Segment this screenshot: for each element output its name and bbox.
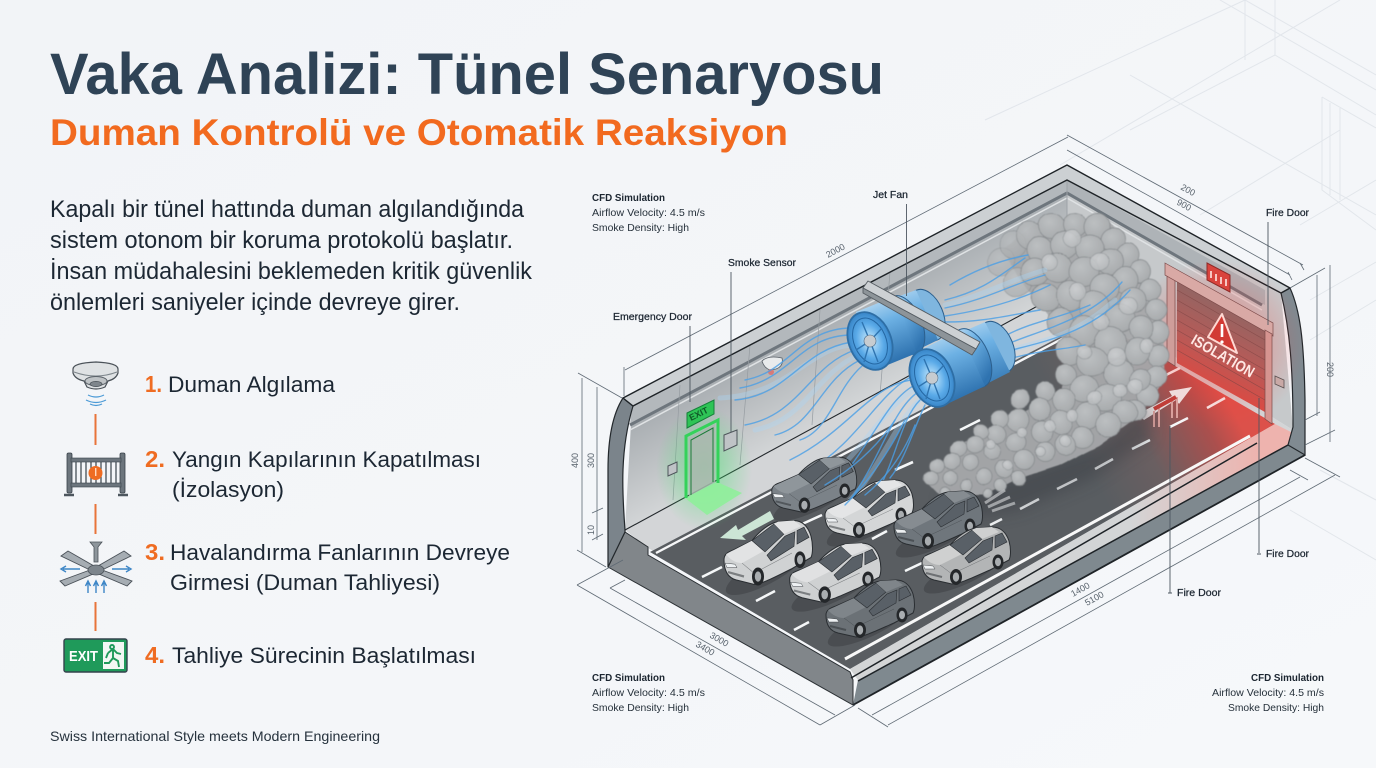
footer tagline: Swiss International Style meets Modern Engineering	[50, 728, 380, 744]
icon: exit sign	[64, 639, 127, 672]
road lane dashes	[702, 368, 1225, 630]
dimension values: 3400	[694, 639, 716, 658]
label: fire door lower: Fire Door	[1177, 587, 1221, 599]
car: dark grey back right	[891, 491, 982, 565]
smoke wisps behind cars	[985, 490, 1015, 511]
car: white SUV front	[721, 521, 812, 604]
wall box beside door	[1275, 376, 1284, 388]
smoke base mass	[925, 222, 1165, 495]
ceiling cap	[623, 165, 1290, 406]
right cut arch section	[1281, 288, 1305, 455]
intro paragraph	[50, 196, 533, 316]
red barrier	[1154, 397, 1177, 427]
exit sign: EXIT	[687, 405, 710, 423]
cars	[721, 457, 1010, 654]
step 2 label: (İzolasyon)	[172, 477, 284, 502]
dimension lines	[570, 135, 1340, 727]
airflow over cars	[825, 420, 915, 505]
jet fans	[839, 281, 1022, 414]
front concrete kerb	[608, 532, 853, 705]
dimension values: 2000	[824, 242, 847, 260]
step connectors	[94, 414, 96, 631]
step 1 label: Duman Algılama	[168, 372, 336, 397]
step 1 label: 1.	[145, 371, 162, 397]
left cut arch section	[608, 398, 633, 567]
step 3 label: 3.	[145, 539, 165, 565]
sidewalk and road	[625, 290, 1293, 667]
icon: smoke detector	[73, 362, 118, 406]
intro paragraph: önlemleri saniyeler içinde devreye girer.	[50, 289, 460, 316]
front right face	[850, 424, 1305, 705]
callout: CFD top left: CFD Simulation	[592, 192, 665, 204]
wall base line	[625, 290, 1067, 530]
car: dark sedan front	[823, 580, 914, 654]
step 3 label: Girmesi (Duman Tahliyesi)	[170, 570, 440, 595]
subtitle: Duman Kontrolü ve Otomatik Reaksiyon	[50, 112, 788, 153]
jet fan rear	[839, 284, 952, 377]
step 4 label: 4.	[145, 642, 165, 668]
smoke cloud	[925, 212, 1169, 498]
ceiling beam	[863, 281, 980, 355]
step 3 label	[145, 539, 510, 595]
isolation text: ISOLATION	[1188, 332, 1257, 381]
dimension values: 900	[1175, 197, 1193, 213]
dimension values: 3000	[708, 630, 730, 649]
label: emergency door: Emergency Door	[613, 311, 693, 323]
label: fire door lower	[1168, 426, 1221, 599]
label: smoke sensor: Smoke Sensor	[728, 257, 796, 269]
step 2 label	[145, 446, 481, 502]
dimension values: 10	[586, 525, 596, 535]
intro paragraph: Kapalı bir tünel hattında duman algılandığında	[50, 196, 525, 223]
label: fire door top	[1266, 207, 1309, 325]
blue airflow lines through smoke	[945, 255, 1130, 360]
car: silver sedan right	[919, 527, 1010, 601]
car: white sedan middle	[787, 543, 881, 620]
smoke sensor on wall	[762, 357, 782, 375]
wall boxes	[668, 430, 737, 476]
fire door: isolation shutter	[1125, 260, 1305, 430]
label: jet fan: Jet Fan	[873, 189, 908, 201]
dimension values: 400	[570, 453, 580, 468]
blueprint background lines	[985, 0, 1376, 560]
dimension values: 5100	[1083, 589, 1105, 608]
emergency door	[656, 400, 752, 530]
car: white back middle	[822, 480, 914, 554]
label: emergency door	[613, 311, 693, 402]
icon: ventilation fan	[60, 542, 132, 593]
title: Vaka Analizi: Tünel Senaryosu	[50, 42, 884, 107]
back wall	[625, 180, 1293, 530]
label: fire door right: Fire Door	[1266, 548, 1309, 560]
road surface	[650, 319, 1275, 669]
jet fan front	[901, 316, 1022, 414]
tunnel cutaway illustration	[608, 165, 1305, 705]
dimension values	[570, 182, 1335, 658]
label: jet fan	[873, 189, 908, 296]
callout: CFD top left	[592, 192, 705, 234]
intro paragraph: sistem otonom bir koruma protokolü başlatır.	[50, 227, 513, 254]
step 3 label: Havalandırma Fanlarının Devreye	[170, 540, 510, 565]
step 2 label: Yangın Kapılarının Kapatılması	[172, 447, 481, 472]
blue airflow lines left of fans	[720, 328, 925, 500]
callout: CFD bottom right	[1212, 672, 1324, 714]
dimension values: 200	[1325, 362, 1335, 377]
car: dark grey back left	[769, 457, 857, 529]
callout: CFD bottom left	[592, 672, 705, 714]
callout: CFD bottom right: CFD Simulation	[1251, 672, 1324, 684]
callout: CFD bottom left: Airflow Velocity: 4.5 m/s	[592, 687, 705, 699]
label: fire door top: Fire Door	[1266, 207, 1309, 219]
callout: CFD top left: Smoke Density: High	[592, 222, 689, 234]
callout: CFD bottom left: CFD Simulation	[592, 672, 665, 684]
step 4 label: Tahliye Sürecinin Başlatılması	[172, 643, 476, 668]
callout: CFD bottom left: Smoke Density: High	[592, 702, 689, 714]
callout: CFD bottom right: Airflow Velocity: 4.5 m/s	[1212, 687, 1324, 699]
dimension values: 300	[586, 453, 596, 468]
icon: exit sign: EXIT	[69, 648, 98, 665]
icon: fire door gate	[64, 453, 128, 495]
callout: CFD top left: Airflow Velocity: 4.5 m/s	[592, 207, 705, 219]
label: fire door right	[1257, 398, 1309, 560]
step 2 label: 2.	[145, 446, 165, 472]
smoke shadow on road	[940, 400, 1150, 520]
callout: CFD bottom right: Smoke Density: High	[1228, 702, 1324, 714]
warning triangle	[1208, 314, 1237, 353]
intro paragraph: İnsan müdahalesini beklemeden kritik güvenlik	[50, 258, 533, 285]
green floor arrow	[720, 511, 774, 540]
dimension values: 1400	[1069, 580, 1091, 599]
dimension values: 200	[1179, 182, 1197, 198]
red floor arrow	[1138, 387, 1192, 420]
